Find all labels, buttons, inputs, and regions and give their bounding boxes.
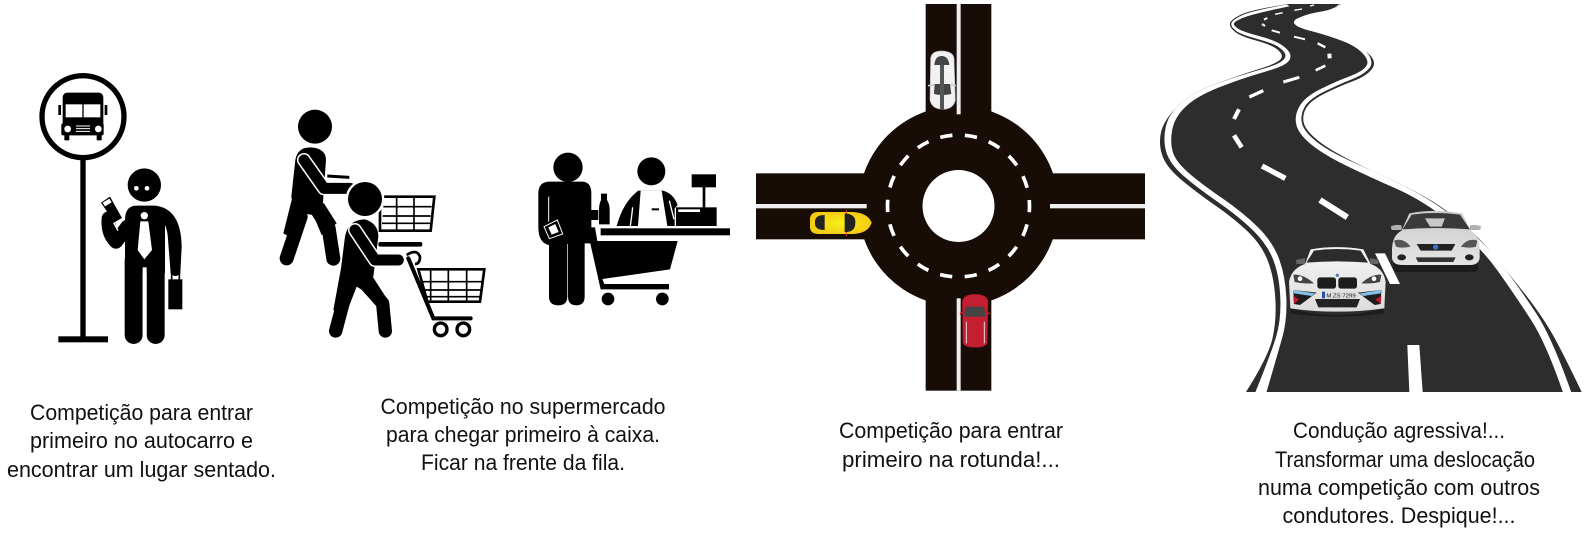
road centre dashes — [1234, 5, 1423, 392]
caption: aggressive driving: Transformar uma deslocação — [1275, 447, 1535, 472]
icon: yellow car — [810, 210, 872, 236]
caption: bus competition: primeiro no autocarro e — [30, 428, 253, 453]
icon: white BMW front view — [1289, 247, 1386, 317]
panel: supermarket checkout — [538, 153, 730, 305]
caption: aggressive driving — [1258, 418, 1540, 528]
panel: roundabout — [756, 4, 1145, 391]
caption: bus competition: Competição para entrar — [30, 400, 253, 425]
icon: person pushing rear cart — [283, 110, 350, 259]
icon: man with phone and briefcase — [101, 168, 182, 347]
icon: white car — [928, 51, 956, 109]
left road edge line — [1165, 5, 1290, 392]
caption: roundabout competition: Competição para entrar — [839, 418, 1063, 443]
road surface — [756, 4, 1145, 391]
caption: roundabout competition — [839, 418, 1063, 472]
caption: supermarket competition: Competição no supermercado — [380, 394, 666, 419]
icon: silver Volvo front view — [1391, 211, 1481, 272]
caption: aggressive driving: Condução agressiva!... — [1293, 418, 1505, 443]
caption: supermarket competition: Ficar na frente da fila. — [421, 450, 625, 475]
icon: customer with bottle — [538, 153, 610, 305]
icon: bus stop sign and pole — [42, 76, 124, 342]
icon: white BMW front view: M ZS 7299 — [1326, 293, 1356, 299]
caption: bus competition — [7, 400, 276, 482]
caption: bus competition: encontrar um lugar sentado. — [7, 457, 276, 482]
panel: shoppers racing with carts — [283, 110, 484, 336]
panel: winding road — [1160, 4, 1582, 392]
icon: checkout shopping cart — [587, 227, 678, 305]
right road edge line — [1294, 5, 1571, 392]
panel: bus stop pictogram — [42, 76, 182, 347]
caption: roundabout competition: primeiro na rotunda!... — [842, 447, 1060, 472]
icon: cash register and counter — [601, 174, 730, 235]
caption: aggressive driving: condutores. Despique!... — [1282, 503, 1516, 528]
caption: supermarket competition — [380, 394, 666, 475]
icon: rear shopping cart — [378, 197, 434, 247]
icon: red car — [960, 294, 990, 347]
icon: person pushing front cart — [333, 180, 398, 331]
road surface — [1160, 4, 1582, 392]
caption: aggressive driving: numa competição com outros — [1258, 475, 1540, 500]
icon: front shopping cart — [407, 252, 484, 336]
caption: supermarket competition: para chegar primeiro à caixa. — [386, 422, 660, 447]
icon: cashier — [617, 157, 678, 226]
